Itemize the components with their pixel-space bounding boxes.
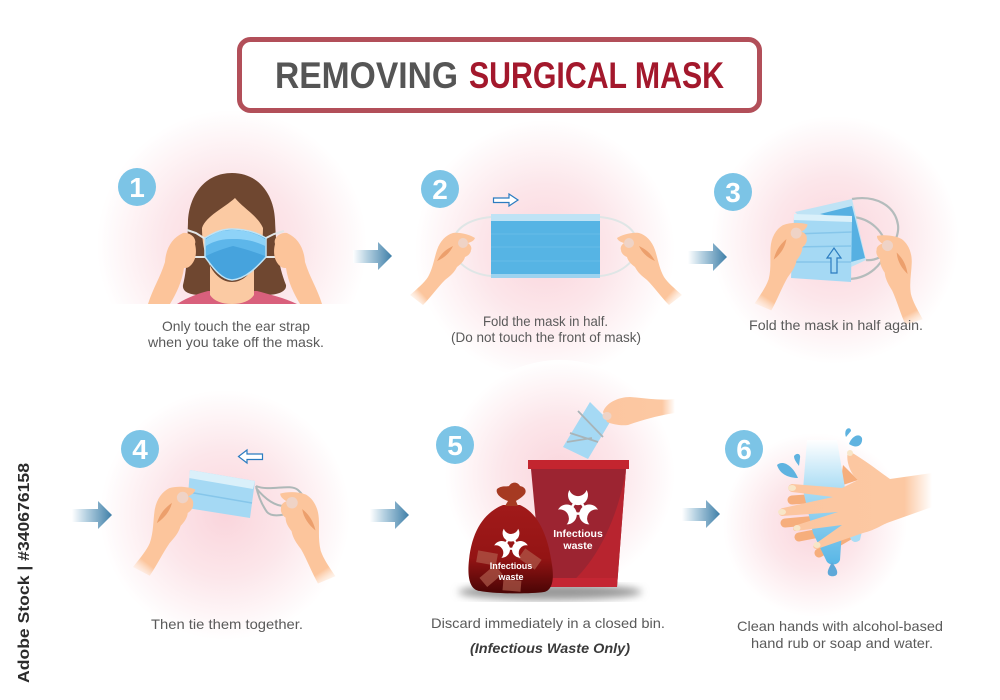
bag label: waste xyxy=(497,572,524,582)
mask ear loops xyxy=(567,411,603,442)
glow: step 6 xyxy=(723,433,907,617)
tapes on bag xyxy=(476,548,542,592)
caption 6: Clean hands with alcohol-based xyxy=(737,618,943,634)
mask upper band xyxy=(206,230,265,246)
mask top band xyxy=(491,214,600,221)
caption 5 xyxy=(431,615,665,656)
caption 6: hand rub or soap and water. xyxy=(751,635,933,651)
glow: step 3 xyxy=(711,116,959,364)
folded front mask xyxy=(791,217,852,282)
woman's hair xyxy=(183,173,286,295)
back hand fingers xyxy=(785,496,850,553)
number 6 xyxy=(725,430,763,468)
number 2 xyxy=(421,170,459,208)
caption 6 xyxy=(737,618,943,651)
front mask band xyxy=(794,214,852,222)
mask top band xyxy=(189,470,255,489)
arrow 2 to 3 xyxy=(688,243,727,271)
mask inner dark side xyxy=(820,206,865,262)
ear straps xyxy=(187,230,284,257)
step 5 panel xyxy=(458,397,675,600)
fingernails xyxy=(778,450,853,548)
title: REMOVING xyxy=(275,55,458,96)
bag label: Infectious xyxy=(490,561,532,571)
falling drop xyxy=(828,562,837,576)
left big splash xyxy=(777,463,798,478)
number 2: 2 xyxy=(432,174,448,205)
left hand xyxy=(121,484,209,578)
number 3: 3 xyxy=(725,177,741,208)
caption 5: Discard immediately in a closed bin. xyxy=(431,615,665,631)
glow: step 5 xyxy=(445,360,675,590)
lower water blob xyxy=(849,531,862,542)
caption 1: when you take off the mask. xyxy=(147,334,324,350)
number 1 xyxy=(118,168,156,206)
caption 2: Fold the mask in half. xyxy=(483,313,608,329)
hand dropping mask xyxy=(603,397,675,425)
arrow into step 4 xyxy=(72,501,112,529)
bin biohazard icon xyxy=(557,490,599,526)
left hand xyxy=(737,219,827,314)
caption 5: (Infectious Waste Only) xyxy=(470,640,630,656)
waste bin body xyxy=(531,469,626,587)
step 3 panel xyxy=(737,198,946,330)
water stream xyxy=(803,440,853,564)
bin rim xyxy=(528,460,629,469)
mask middle fold xyxy=(206,239,265,256)
right hand xyxy=(852,231,946,330)
ear loops xyxy=(453,217,637,276)
title xyxy=(240,40,760,110)
bin label: waste xyxy=(562,540,593,552)
direction arrow xyxy=(827,248,841,273)
glow: step 2 xyxy=(415,120,675,380)
flat mask xyxy=(491,214,600,277)
pleat xyxy=(188,492,252,503)
bin label xyxy=(553,528,603,552)
arrow 4 to 5 xyxy=(370,501,409,529)
caption 2: (Do not touch the front of mask) xyxy=(451,329,641,345)
caption 2 xyxy=(451,313,641,345)
bin base xyxy=(541,578,617,587)
number 1: 1 xyxy=(129,172,145,203)
red bag xyxy=(468,505,553,593)
direction arrow xyxy=(238,450,262,463)
face mask xyxy=(205,229,266,280)
glow: step 1 xyxy=(97,110,367,380)
ear loops xyxy=(256,486,305,515)
caption 1: Only touch the ear strap xyxy=(162,318,310,334)
white strip under step 1 xyxy=(90,304,365,384)
step 4 panel xyxy=(121,450,354,587)
number 5: 5 xyxy=(447,430,463,461)
number 4: 4 xyxy=(132,434,148,465)
glow: step 4 xyxy=(100,390,350,640)
step 6 panel xyxy=(777,428,932,576)
number 5 xyxy=(436,426,474,464)
left small splash xyxy=(794,454,800,466)
right small splash xyxy=(845,428,851,437)
bag knot and ruffle xyxy=(497,483,526,506)
fingernail xyxy=(602,412,612,420)
number 4 xyxy=(121,430,159,468)
caption 4: Then tie them together. xyxy=(151,616,303,632)
number 6: 6 xyxy=(736,434,752,465)
arrow 1 to 2 xyxy=(353,242,392,270)
right big splash xyxy=(849,435,862,446)
arrow 5 to 6 xyxy=(682,500,720,528)
back hand thumb xyxy=(840,465,858,486)
back mask layers xyxy=(795,199,866,267)
step 1 panel xyxy=(148,173,322,304)
mask bottom band xyxy=(491,274,600,278)
ear loops xyxy=(850,198,898,279)
ground shadow xyxy=(458,584,642,600)
caption 3: Fold the mask in half again. xyxy=(749,317,923,333)
bin label: Infectious xyxy=(553,528,603,540)
title: SURGICAL MASK xyxy=(469,55,724,96)
direction arrow xyxy=(494,194,518,206)
stock credit: Adobe Stock | #340676158 xyxy=(16,463,33,683)
front hand xyxy=(779,451,932,549)
caption 1 xyxy=(147,318,324,350)
pleats xyxy=(792,232,852,262)
bag label xyxy=(490,561,532,582)
left hand and arm xyxy=(148,233,196,304)
neck and face xyxy=(202,198,263,304)
mask pleats xyxy=(491,234,600,261)
right hand xyxy=(260,488,354,587)
discarded mask xyxy=(563,402,610,459)
number 3 xyxy=(714,173,752,211)
right hand and arm xyxy=(274,233,322,304)
right hand xyxy=(617,233,682,305)
folded mask xyxy=(187,470,255,518)
left hand xyxy=(410,233,475,305)
shirt xyxy=(177,291,297,304)
bag biohazard icon xyxy=(494,529,528,559)
step 2 panel xyxy=(410,194,682,305)
bin light panel xyxy=(566,469,626,587)
